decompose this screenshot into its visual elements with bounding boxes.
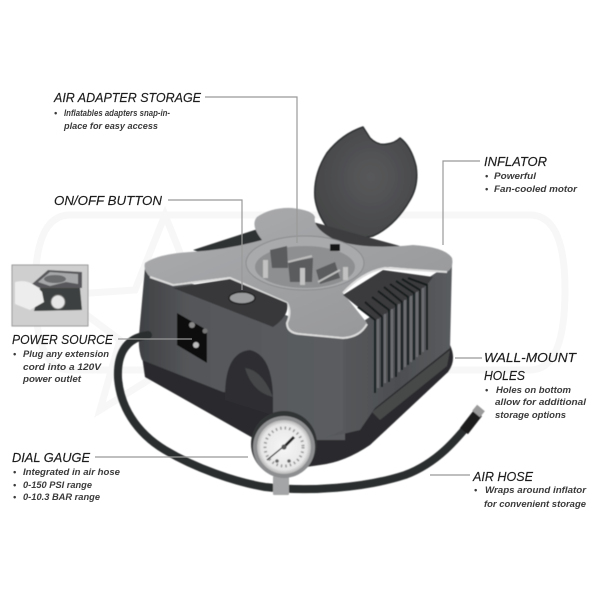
callout: inflator: INFLATOR — [484, 154, 547, 169]
callout: wall-mount holes: • — [485, 385, 488, 395]
left body face — [139, 268, 345, 440]
button recess — [173, 279, 287, 327]
callout: wall-mount holes: WALL-MOUNT — [484, 350, 577, 365]
callout: dial gauge: • — [13, 492, 16, 502]
callout: air hose — [472, 469, 587, 509]
callout: on/off button: ON/OFF BUTTON — [54, 193, 163, 208]
callout: dial gauge: • — [13, 480, 16, 490]
callout: wall-mount holes: HOLES — [484, 368, 525, 383]
base plate — [142, 345, 453, 470]
right body face — [317, 262, 452, 440]
air hose — [118, 335, 481, 489]
top X-shaped surface — [145, 208, 452, 337]
callout: air adapter storage: AIR ADAPTER STORAGE — [53, 90, 201, 105]
callout: inflator: • — [485, 184, 488, 194]
callout: power source — [12, 332, 113, 384]
power outlet — [177, 313, 208, 363]
callout: wall-mount holes: allow for additional — [495, 397, 587, 407]
callout: inflator: Powerful — [494, 171, 537, 181]
callout: air hose: AIR HOSE — [472, 469, 533, 484]
callout: air adapter storage — [53, 90, 201, 131]
callout: air hose: • — [474, 485, 477, 495]
power source thumbnail photo — [12, 265, 88, 326]
on/off button — [229, 292, 255, 304]
callout: air adapter storage: place for easy access — [63, 121, 158, 131]
callout: inflator: Fan-cooled motor — [494, 184, 578, 194]
callout: dial gauge: Integrated in air hose — [23, 467, 120, 477]
callout: power source: • — [13, 349, 16, 359]
cord arch — [225, 350, 273, 415]
callout: power source: cord into a 120V — [23, 362, 102, 372]
callout: dial gauge: • — [13, 467, 16, 477]
callout: power source: Plug any extension — [23, 349, 110, 359]
callout: power source: POWER SOURCE — [12, 332, 113, 347]
callout: power source: power outlet — [22, 374, 82, 384]
adapter storage bowl — [246, 236, 364, 290]
callout: inflator: • — [485, 171, 488, 181]
vent rib highlights — [378, 288, 423, 388]
leader lines — [95, 97, 482, 475]
callout: inflator — [484, 154, 578, 194]
callout: wall-mount holes: storage options — [495, 410, 566, 420]
callout: air adapter storage: • — [54, 108, 57, 118]
lid — [315, 127, 417, 250]
callout: wall-mount holes: Holes on bottom — [496, 385, 571, 395]
right vent recess — [343, 270, 433, 321]
callout: air hose: Wraps around inflator — [485, 485, 587, 495]
body back shadow — [193, 226, 280, 262]
rim highlight — [150, 268, 447, 338]
callout: wall-mount holes — [484, 350, 587, 420]
vent ribs — [358, 278, 427, 393]
watermark — [35, 215, 565, 410]
dial gauge — [251, 411, 317, 495]
callout: dial gauge: DIAL GAUGE — [12, 450, 90, 465]
inflator product illustration — [118, 127, 481, 495]
base right slot — [372, 350, 450, 420]
callout: dial gauge: 0-10.3 BAR range — [23, 492, 100, 502]
callout: air adapter storage: Inflatables adapters snap-in- — [64, 108, 170, 118]
callout: air hose: for convenient storage — [484, 499, 586, 509]
callout: dial gauge — [12, 450, 120, 502]
callout: dial gauge: 0-150 PSI range — [23, 480, 92, 490]
